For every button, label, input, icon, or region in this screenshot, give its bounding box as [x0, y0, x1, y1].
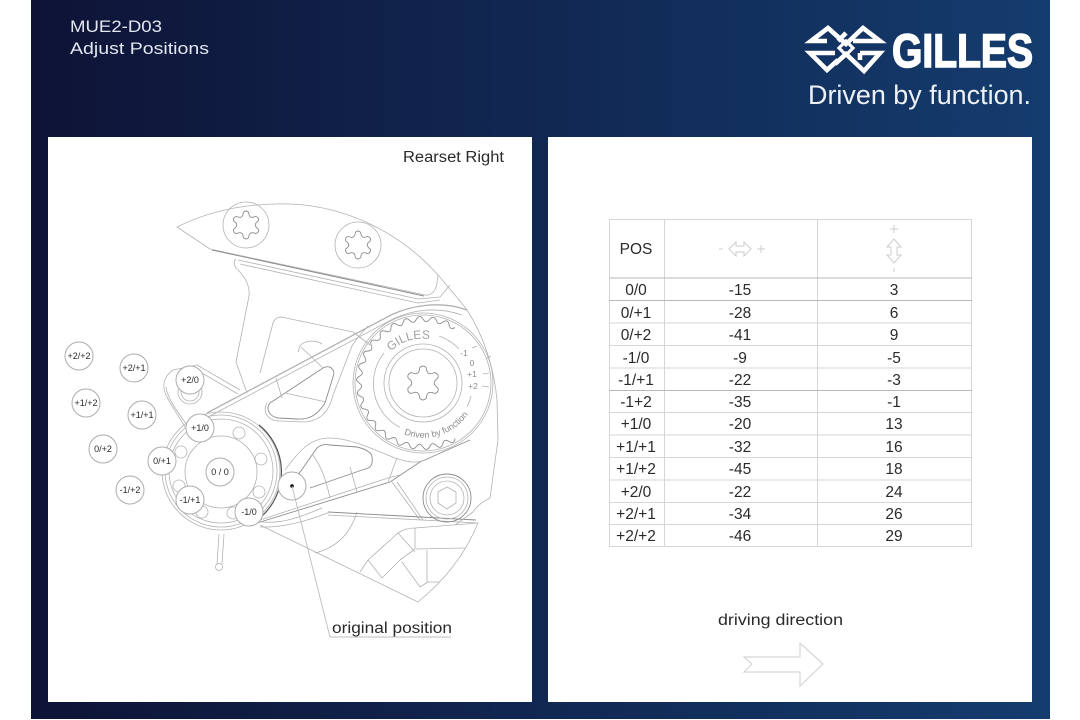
adjuster knob — [353, 313, 493, 453]
table grid — [609, 219, 972, 546]
table rows: -34 — [729, 506, 752, 523]
logo wordmark: GILLES — [892, 24, 1033, 77]
title — [70, 17, 209, 58]
position markers: 0/+2 — [94, 444, 112, 454]
panel: rearset drawing — [48, 137, 532, 702]
knob scale labels: +2 — [468, 381, 478, 391]
position markers: +1/+1 — [130, 410, 154, 420]
table rows: +2/0 — [621, 484, 652, 501]
table rows: -1 — [887, 394, 901, 411]
main arm — [207, 305, 467, 422]
logo: Gilles — [808, 24, 1033, 110]
lower bracket — [257, 438, 478, 602]
position markers: +1/0 — [191, 423, 209, 433]
position markers: 0 / 0 — [211, 467, 229, 477]
table rows: +2/+2 — [616, 528, 656, 545]
table rows: -9 — [733, 350, 747, 367]
position markers: +1/+2 — [74, 398, 98, 408]
knob tagline: Driven by function — [404, 412, 468, 438]
table rows — [616, 282, 903, 545]
knob scale labels: -1 — [460, 348, 468, 358]
table rows: 29 — [885, 528, 903, 545]
position markers: +2/+2 — [67, 351, 91, 361]
table rows: -32 — [729, 439, 751, 456]
table rows: +2/+1 — [616, 506, 656, 523]
table rows: 24 — [885, 484, 903, 501]
knob brand text: GILLES — [388, 330, 430, 350]
eccentric disc — [162, 365, 281, 570]
knob scale labels: +1 — [467, 369, 477, 379]
table rows: -35 — [729, 394, 751, 411]
icon: vertical adjust arrow — [887, 225, 901, 272]
technical drawing of rearset — [64, 202, 498, 602]
callout: original position: original position — [332, 620, 452, 637]
table rows: +1/0 — [621, 416, 652, 433]
table rows: 0/+1 — [621, 305, 651, 322]
logo tagline: Driven by function. — [808, 80, 1031, 110]
icon: logo emblem — [810, 28, 880, 71]
table rows: -45 — [729, 461, 751, 478]
table rows: -5 — [887, 350, 901, 367]
table rows: -20 — [729, 416, 752, 433]
table rows: 3 — [890, 282, 898, 299]
position markers: +2/+1 — [122, 363, 146, 373]
table rows: +1/+2 — [616, 461, 656, 478]
table rows: -28 — [729, 305, 751, 322]
table rows: 0/0 — [625, 282, 647, 299]
table rows: -1+2 — [620, 394, 652, 411]
position markers: -1/+2 — [120, 485, 140, 495]
upper plate — [177, 202, 498, 512]
table rows: +1/+1 — [616, 439, 656, 456]
table rows: 26 — [885, 506, 903, 523]
table rows: -1/+1 — [618, 372, 654, 389]
arrow: driving direction — [744, 643, 823, 686]
table header: POS — [620, 241, 652, 258]
table rows: 18 — [885, 461, 903, 478]
knob scale labels: 0 — [470, 358, 475, 368]
position markers — [65, 342, 306, 526]
knob scale labels — [460, 348, 478, 391]
panel: position table — [548, 137, 1032, 702]
table rows: -46 — [729, 528, 751, 545]
position markers: 0/+1 — [153, 456, 171, 466]
knob scallops — [355, 316, 456, 450]
table rows: -1/0 — [623, 350, 650, 367]
panel heading: Rearset Right — [403, 149, 505, 166]
icon: horizontal adjust arrow — [719, 242, 765, 256]
table rows: -3 — [887, 372, 901, 389]
table rows: 0/+2 — [621, 327, 651, 344]
title: MUE2-D03 — [70, 17, 162, 36]
position markers: -1/+1 — [180, 495, 200, 505]
table rows: -15 — [729, 282, 751, 299]
table rows: 16 — [885, 439, 903, 456]
table rows: 6 — [890, 305, 898, 322]
table rows: -22 — [729, 484, 751, 501]
table rows: 13 — [885, 416, 903, 433]
position markers: -1/0 — [241, 507, 257, 517]
table rows: -22 — [729, 372, 751, 389]
callout: original position — [290, 484, 452, 637]
driving direction label: driving direction — [718, 612, 843, 629]
position markers: +2/0 — [181, 375, 199, 385]
table rows: -41 — [729, 327, 751, 344]
table rows: 9 — [890, 327, 898, 344]
title: Adjust Positions — [70, 39, 209, 58]
